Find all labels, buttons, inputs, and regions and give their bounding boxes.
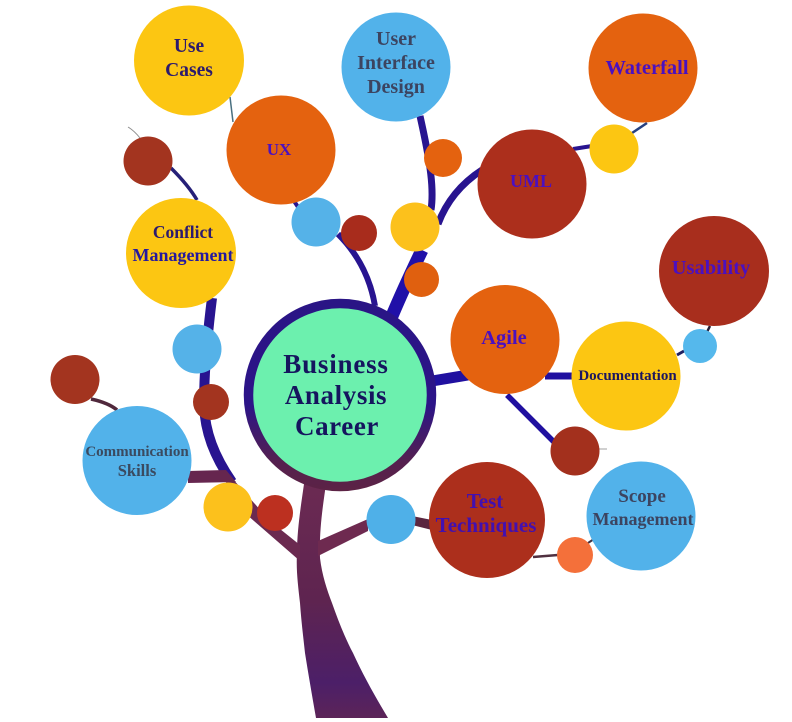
- small nodes: [50, 124, 717, 573]
- small node: red left stem: [193, 384, 229, 420]
- node: test techniques: Test: [467, 489, 503, 513]
- small node: dark red lower right: [550, 426, 600, 476]
- branch: twig beside dark node: [599, 448, 607, 450]
- branch: agile to documentation: [545, 372, 575, 380]
- small node: red lower left: [257, 495, 293, 531]
- branch: yellow to waterfall: [632, 123, 647, 133]
- branch: stem to orange node: [420, 116, 432, 210]
- small node: blue under UX: [292, 198, 340, 246]
- node: use cases: Use: [174, 36, 205, 57]
- node: conflict management: [126, 198, 236, 308]
- branch: trunk to right: [318, 519, 368, 556]
- branch: trunk to left: [222, 478, 300, 561]
- node: UML: UML: [510, 171, 552, 191]
- node: communication skills: Skills: [118, 461, 157, 480]
- small node: yellow upper right: [590, 124, 638, 174]
- branch: test to orange: [533, 555, 558, 557]
- small node: yellow lower left: [204, 482, 252, 532]
- node: conflict management: Management: [133, 245, 233, 265]
- small node: blue right: [683, 329, 717, 363]
- node: agile: [450, 285, 560, 394]
- node: usability: [659, 216, 769, 326]
- node: UX: [226, 96, 336, 204]
- node: usability: Usability: [672, 257, 751, 279]
- node: user interface design: [342, 12, 450, 122]
- small node: orange lower stem: [404, 262, 439, 297]
- small node: dark red far left: [50, 355, 100, 404]
- node: scope management: [586, 462, 696, 570]
- branch: to test techniques: [412, 516, 432, 530]
- node: scope management: Scope: [618, 486, 666, 507]
- hub: business analysis career: [248, 304, 432, 486]
- hub: business analysis career: Business: [283, 349, 389, 379]
- branch: left stem: [204, 298, 232, 482]
- branch: dark node to communication: [91, 399, 117, 410]
- branch: stem to UML: [438, 170, 482, 224]
- branch: small node to conflict: [171, 168, 197, 200]
- node: UML: [478, 130, 586, 238]
- node: communication skills: [82, 406, 192, 515]
- node: user interface design: Interface: [357, 52, 435, 74]
- node: conflict management: Conflict: [153, 222, 213, 242]
- branch: UML to yellow: [573, 146, 592, 149]
- branch: orange to scope: [588, 539, 594, 543]
- node: use cases: [134, 6, 244, 116]
- branch: to communication skills: [188, 470, 236, 483]
- node: UX: UX: [267, 140, 292, 159]
- branch: main right stem: [392, 250, 422, 316]
- branch: agile to small node: [507, 395, 554, 442]
- node: scope management: Management: [593, 509, 693, 529]
- branch: UX to blue: [294, 201, 298, 207]
- node: documentation: [572, 322, 680, 430]
- branch: usability to blue: [707, 326, 710, 332]
- node: communication skills: Communication: [85, 444, 189, 460]
- branch: stem to red node: [338, 234, 375, 306]
- node: agile: Agile: [481, 327, 527, 349]
- node: use cases: Cases: [165, 60, 213, 81]
- node: user interface design: Design: [367, 76, 425, 98]
- small node: red beside blue: [341, 215, 377, 251]
- connector branches: [91, 97, 710, 557]
- small node: yellow center stem: [390, 202, 440, 252]
- hub: business analysis career: Analysis: [285, 380, 387, 410]
- node: user interface design: User: [376, 28, 416, 50]
- small node: blue lower branch: [366, 495, 416, 544]
- tree trunk: [188, 470, 432, 718]
- node: test techniques: Techniques: [436, 513, 536, 537]
- small node: blue left stem: [172, 324, 222, 374]
- small node: orange lower right: [557, 537, 593, 573]
- node: waterfall: Waterfall: [605, 57, 689, 79]
- branch: thin twig: [128, 127, 140, 138]
- node: waterfall: [588, 14, 698, 122]
- branch: center to agile: [432, 375, 468, 381]
- small node: dark red upper left: [124, 136, 172, 186]
- node: test techniques: [429, 462, 545, 578]
- small node: orange upper stem: [424, 139, 462, 177]
- branch: documentation to blue: [677, 351, 684, 355]
- branch: use cases to UX: [230, 97, 233, 122]
- node: documentation: Documentation: [578, 368, 677, 384]
- hub: business analysis career: Career: [295, 411, 379, 441]
